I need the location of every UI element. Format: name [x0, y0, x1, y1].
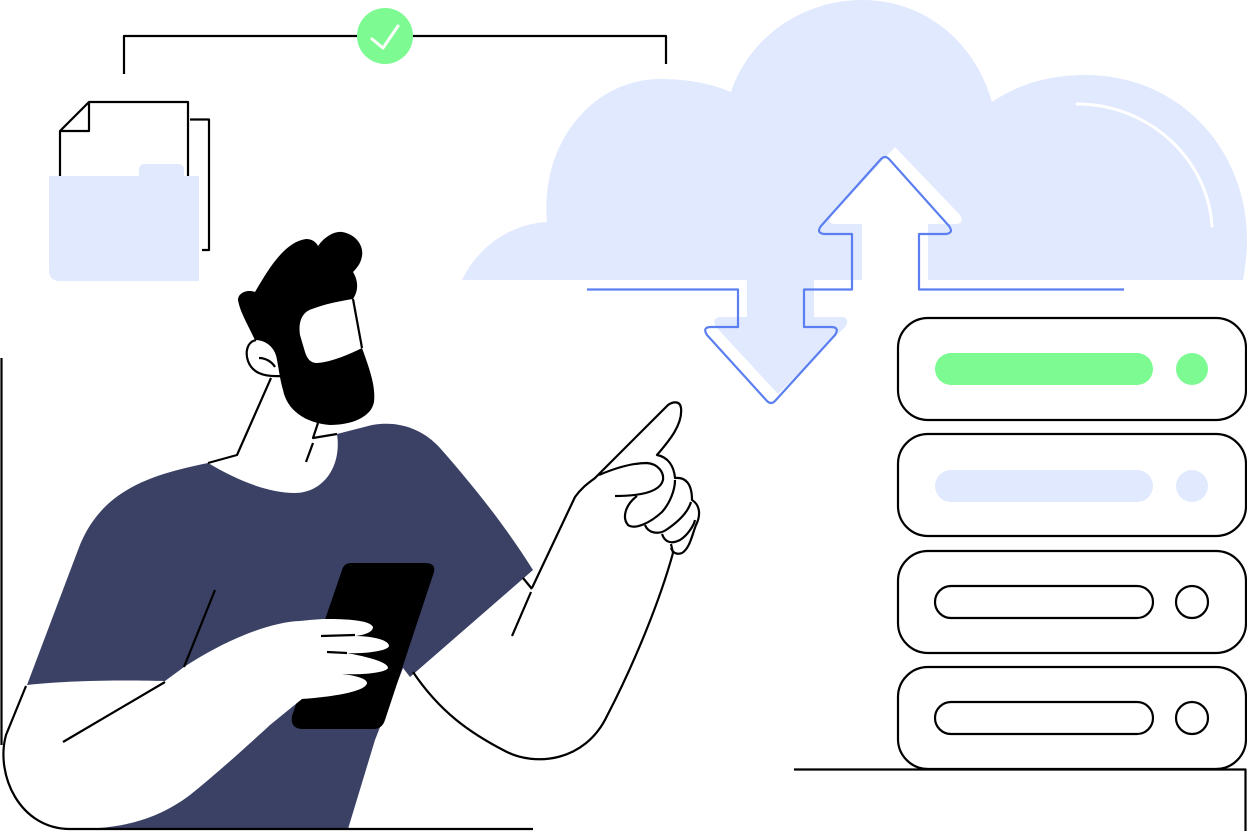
server rack	[898, 318, 1246, 769]
server unit 4: outline	[898, 667, 1246, 769]
left wall line	[0, 358, 3, 745]
icon: green check badge	[357, 8, 413, 64]
server shelf line	[794, 770, 1246, 831]
cloud	[462, 0, 1247, 280]
icon: documents in folder	[49, 102, 209, 281]
person	[3, 232, 699, 829]
server unit 1: active	[898, 318, 1246, 420]
arrow cutouts in cloud	[587, 147, 962, 394]
neck lines	[208, 378, 337, 463]
right arm and pointing hand	[413, 402, 699, 759]
left arm and hand	[3, 590, 533, 829]
server unit 2: light	[898, 434, 1246, 536]
hair and beard	[238, 232, 374, 425]
connector bracket	[124, 36, 666, 74]
shirt	[20, 424, 533, 829]
server unit 3: outline	[898, 551, 1246, 653]
face	[300, 299, 362, 363]
sync arrows outline	[587, 157, 1124, 403]
phone	[292, 563, 434, 729]
ear	[247, 338, 290, 376]
